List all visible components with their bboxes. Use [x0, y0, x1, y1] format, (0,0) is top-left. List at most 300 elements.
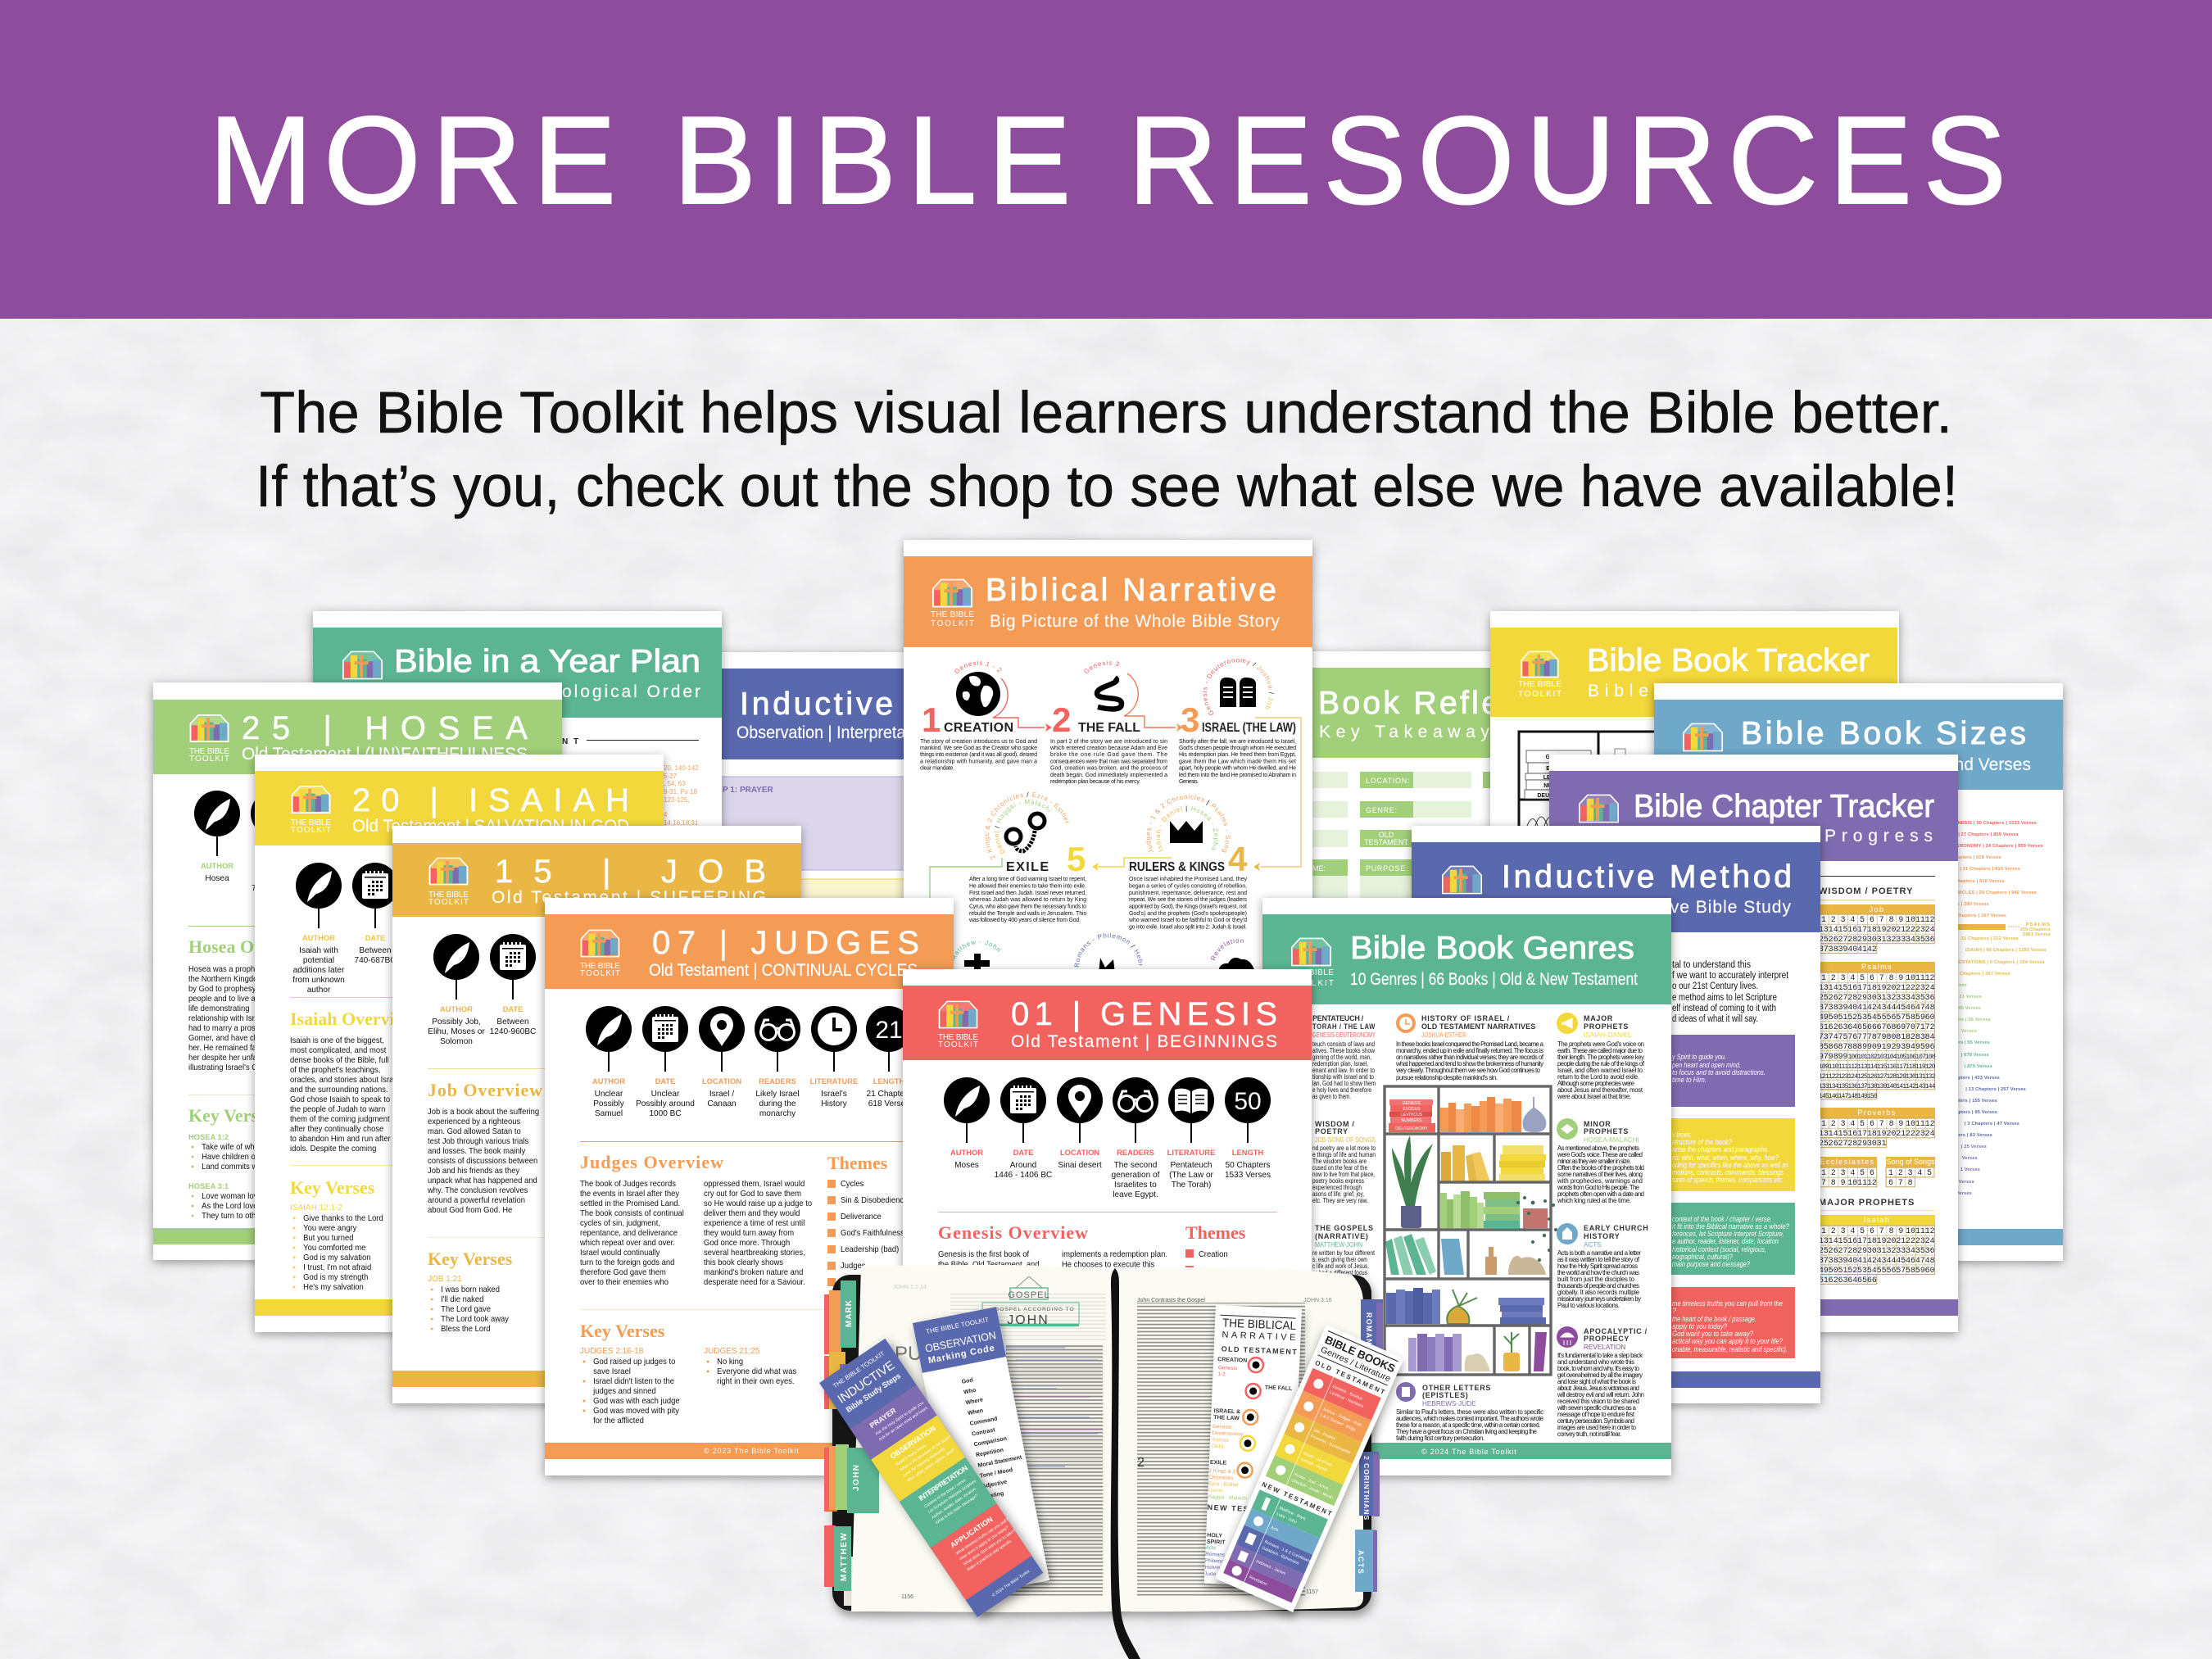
Judges overview: repentance, and deliverance [580, 1229, 678, 1238]
Isaiah header: Old Testament | SALVATION IN GOD [352, 817, 629, 836]
bookmark: bible books genres: Joshua - Judges - Ruth [1321, 1407, 1362, 1428]
step 4: rulers and kings: appointed by God), the Kings (Israel's request, not [1129, 904, 1247, 909]
genre: other letters: OTHER LETTERS [1422, 1384, 1491, 1392]
genre: other letters: They have a great focus on Christian living and keeping the [1396, 1428, 1537, 1435]
Sizes list: | 678 Verses [1961, 1053, 1989, 1058]
Isaiah overview: oracles, and stories about Israel [290, 1076, 400, 1085]
Isaiah icons and facts: author [307, 986, 331, 995]
Hosea key verses: As the Lord loves [202, 1202, 261, 1211]
gospel heading on the page: JOHN [1007, 1313, 1049, 1327]
Job key verses: The Lord took away [441, 1315, 509, 1324]
major prophets heading and Isaiah grid: Isaiah [1864, 1216, 1890, 1224]
genre: apocalyptic: will destroy evil and will return. John [1557, 1391, 1644, 1398]
bookshelf illustration: EXODUS [1403, 1107, 1421, 1112]
bookmark: the biblical narrative: SPIRIT [1207, 1539, 1226, 1546]
Judges overview: settled in the Promised Land. [580, 1199, 680, 1208]
bookmark: inductive bible study steps: Read it many times. [895, 1443, 928, 1467]
bookshelf illustration: DEUTERONOMY [1395, 1126, 1428, 1131]
card: 01 Genesis [903, 969, 1312, 1547]
Sizes footer [1654, 1229, 2063, 1245]
Sizes list: 1 Verses [1960, 1167, 1980, 1172]
Judges facts: during the [759, 1099, 796, 1108]
Judges facts: Israel's [821, 1090, 847, 1099]
bookmark: the biblical narrative: ISRAEL & [1213, 1408, 1240, 1415]
bookmark: observation marking code: Comparison [973, 1436, 1008, 1448]
card: Bible Book Tracker: TOOLKIT [1518, 690, 1562, 699]
genre: early church history: built from just the disciples to [1557, 1276, 1635, 1283]
Hosea key verses: Key Verses [188, 1105, 274, 1126]
Hosea icons and facts: 750-710 BC [252, 884, 296, 893]
genre: other letters: audiences, which makes context important. The authors wrote [1396, 1415, 1543, 1422]
step 2: the fall: which entered creation because Adam and Eve [1049, 746, 1167, 751]
Judges overview: they would turn away from [704, 1229, 794, 1238]
genre: major prophets: MAJOR [1584, 1014, 1613, 1022]
Job header [392, 843, 801, 917]
Isaiah icons and facts: DATE [365, 933, 385, 942]
Method step: prayer [1657, 1035, 1795, 1107]
bookmark: observation marking code: Command [969, 1416, 998, 1427]
card: Book Reflection: Book Reflection [1318, 686, 1580, 721]
Job header: TOOLKIT [428, 898, 469, 907]
Job key verses: I'll die naked [441, 1295, 483, 1304]
genre: major prophets: earth. These are called major due to [1557, 1047, 1643, 1054]
Job overview: Job and his friends as they [428, 1167, 519, 1176]
bookmark: observation marking code: Repetition [976, 1448, 1004, 1458]
narrative header: Big Picture of the Whole Bible Story [990, 612, 1280, 631]
genre: minor prophets: Often the books of the prophets told [1557, 1164, 1644, 1172]
card: Bible in a Year Plan: 4 [664, 811, 668, 818]
Hosea overview: relationship with Israel [188, 1014, 265, 1023]
Psalms chapter grid: 979899 [1819, 1052, 1847, 1061]
Ecclesiastes and Song of Songs grids: 7 8 9 [1821, 1178, 1845, 1187]
Sizes list: PSALMS [2026, 922, 2051, 927]
genre: pentateuch: redemption plan, Israel, [1312, 1060, 1368, 1067]
Judges facts: AUTHOR [592, 1077, 625, 1086]
card: Bible in a Year Plan: , 54, 63 [664, 780, 686, 787]
card: Bible Book Genres [1262, 898, 1671, 1475]
Genesis facts: Moses [954, 1161, 979, 1170]
step 2: the fall: Genesis 3 [1085, 660, 1119, 673]
step 1: creation: mankind. We see God as the Creator who spoke [920, 746, 1037, 751]
Hosea overview [188, 936, 314, 1072]
Judges themes: Leadership (bad) [841, 1245, 899, 1254]
genre: wisdom and poetry: poetry books express [1312, 1177, 1364, 1185]
Isaiah overview: idols. Despite the coming [290, 1145, 376, 1154]
step 5: exile: was followed by 400 years of silence from God. [968, 918, 1081, 923]
genre: history of Israel: pursue relationship despite mankind's sin. [1396, 1074, 1498, 1081]
Genres header [1262, 914, 1671, 1004]
genre: pentateuch: e holy lives and therefore [1312, 1086, 1371, 1094]
card: Bible Book Tracker: GENESIS [1545, 755, 1571, 760]
major prophets heading and Isaiah grid [1819, 1198, 1935, 1285]
Hosea header: THE BIBLE [189, 747, 229, 756]
bookmark: observation marking code: THE BIBLE TOOLKIT [925, 1316, 990, 1335]
card: Bible in a Year Plan [306, 607, 728, 827]
Psalms chapter grid: 100101102103104105106107108 [1848, 1054, 1936, 1061]
Job overview: about God from God. He [428, 1206, 513, 1215]
bookmark: the biblical narrative: Haggai - Malachi [1208, 1494, 1247, 1502]
Job chapter grid: 101112 [1906, 915, 1935, 924]
step 5: exile: whereas Judah was allowed to return by King [968, 897, 1086, 903]
step 2: the fall: death began. God immediately implemented a [1050, 773, 1167, 778]
bookmark: bible books genres: Acts [1270, 1525, 1280, 1533]
Method intro text: tal to understand this [1672, 960, 1751, 970]
genre: history of Israel: monarchy, ended up in exile and finally returned. The focus is [1396, 1047, 1543, 1054]
Method header: Inductive Method [1502, 859, 1792, 895]
gospel heading on the page [982, 1276, 1079, 1327]
Method header [1412, 842, 1820, 932]
Hosea overview: her. He remained faithful [188, 1044, 273, 1053]
step 1: creation: Genesis 1 - 2 [955, 660, 1001, 673]
step 5: exile [929, 791, 1086, 923]
Judges key verses: save Israel [593, 1367, 631, 1376]
Judges themes: Deliverance [841, 1213, 882, 1222]
genre: minor prophets: which king ruled at the time. [1557, 1197, 1631, 1204]
bookmark: inductive bible study steps: Author, reader, date, location. [931, 1486, 978, 1521]
Hosea key verses: HOSEA 3:1 [188, 1181, 229, 1190]
Psalms chapter grid: 121122123124125126127128129130131132 [1819, 1073, 1936, 1081]
genre: wisdom and poetry: e things of life and human [1312, 1151, 1376, 1158]
card: Bible Chapter Tracker [1549, 755, 1958, 1332]
title: MORE BIBLE RESOURCES [209, 91, 2006, 230]
genre: wisdom and poetry: WISDOM / [1315, 1120, 1355, 1128]
Sizes header: Chapters and Verses [1870, 755, 2031, 774]
Genres header: 10 Genres | 66 Books | Old & New Testament [1350, 970, 1638, 989]
Sizes list: Chapters | 95 Verses [1949, 1110, 1997, 1115]
Hosea key verses: They turn to other gods [202, 1212, 282, 1221]
genre: apocalyptic: about: Jesus. Jesus is victorious and [1557, 1385, 1639, 1392]
Genesis icon row [944, 1077, 1271, 1143]
Hosea icons and facts [188, 791, 297, 927]
card: Bible in a Year Plan: Bible in a Year Plan [394, 644, 700, 679]
narrative header: TOOLKIT [931, 619, 974, 628]
genre: early church history: ACTS [1584, 1241, 1602, 1249]
genre: apocalyptic: get overwhelmed by all the imagery [1557, 1371, 1643, 1379]
Genesis overview [938, 1222, 1167, 1270]
Psalms chapter grid: 495051525354555657585960 [1819, 1013, 1935, 1022]
genre: minor prophets: were God's voice. These are called [1557, 1151, 1643, 1158]
Sizes list: | 25 Verses [1961, 1145, 1987, 1149]
left index tabs: MATTHEW [840, 1532, 849, 1581]
Sizes list: Chapters | 433 Verses [1949, 1076, 2000, 1081]
Sizes list [1900, 821, 2051, 1196]
Genesis facts: Pentateuch [1170, 1161, 1213, 1170]
Ecclesiastes and Song of Songs grids: Song of Songs [1886, 1158, 1935, 1166]
step 3: Israel (the law) [1179, 659, 1296, 785]
bookmark: observation marking code: OBSERVATION [924, 1329, 997, 1355]
Psalms chapter grid: 131415161718192021222324 [1819, 983, 1935, 992]
Genesis facts: 1446 - 1406 BC [995, 1171, 1052, 1180]
Isaiah overview: after they continually chose [290, 1125, 384, 1134]
Hosea header: TOOLKIT [189, 755, 229, 764]
card: Bible in a Year Plan: 14,16,18,31 [664, 819, 699, 827]
Hosea overview: Hosea Overview [188, 936, 314, 957]
genre: other letters: faith during first century persecution. [1396, 1435, 1484, 1442]
Sizes list: Verses [1951, 983, 1967, 988]
left index tabs [824, 1281, 879, 1591]
Judges overview: oppressed them, Israel would [704, 1180, 805, 1189]
Genesis facts: 50 Chapters [1226, 1161, 1270, 1170]
Method step: prayer: time to Him. [1672, 1076, 1707, 1084]
bookmark: inductive bible study steps: INDUCTIVE [835, 1358, 897, 1407]
step 1: creation: a relationship with humanity, and gave man a [920, 759, 1037, 765]
Sizes list: Verses [1961, 1029, 1977, 1034]
genre: other letters [1396, 1382, 1543, 1442]
Judges overview: The book consists of continual [580, 1209, 684, 1218]
genre: minor prophets: prophets often open with a date and [1557, 1190, 1644, 1198]
Judges overview: therefore God gave them [580, 1268, 666, 1277]
bookmark: observation marking code [913, 1307, 1049, 1597]
Judges facts: Likely Israel [755, 1090, 800, 1099]
genre: wisdom and poetry: etc. They are very raw. [1312, 1197, 1368, 1204]
Sizes list: | 13 Chapters | 257 Verses [1965, 1087, 2026, 1092]
genre: early church history [1557, 1223, 1648, 1309]
Judges footer: © 2023 The Bible Toolkit [704, 1447, 800, 1455]
Genesis overview: the Bible, Old Testament, and [938, 1260, 1040, 1270]
Job chapter grid: 1 2 3 4 5 6 7 8 9 [1821, 915, 1903, 924]
Judges overview: cycles of sin, judgment, [580, 1219, 660, 1228]
bookmark: inductive bible study steps: What is the main message? [935, 1494, 979, 1525]
Judges key verses: No king [717, 1358, 743, 1367]
Judges header [545, 914, 954, 989]
step 4: rulers and kings: punishment, repentance, deliverance, rest and [1129, 891, 1247, 896]
Sizes list: LEVITICUS | 27 Chapters | 859 Verses [1931, 832, 2019, 837]
bookmark: inductive bible study steps: Context of the book / verse. [923, 1477, 968, 1509]
Job overview: Job Overview [428, 1080, 542, 1100]
genre: early church history: globally. It also records multiple [1557, 1289, 1639, 1296]
genre: history of Israel: what happened and tend to show the brokenness of humanity [1395, 1060, 1543, 1067]
Method step: application: the heart of the book / passage. [1672, 1315, 1756, 1323]
Isaiah overview: Isaiah Overview [290, 1009, 415, 1029]
Sizes list: 10 Chapters | 167 Verses [1949, 913, 2006, 918]
Genesis themes: Themes [1185, 1222, 1246, 1243]
bookshelf illustration: NUMBERS [1401, 1118, 1422, 1123]
genre: apocalyptic [1557, 1326, 1648, 1438]
card: Book Reflection: OLD [1379, 831, 1394, 839]
Judges overview: mankind's broken nature and [704, 1268, 803, 1277]
Isaiah key verses: He's my salvation [303, 1283, 364, 1292]
Method intro text [1672, 960, 1789, 1024]
Ecclesiastes and Song of Songs grids: 6 7 8 [1888, 1178, 1913, 1187]
bookmark: bible books genres: Genesis - Exodus [1331, 1385, 1363, 1402]
bookmark: the biblical narrative: Hebrews - [1204, 1565, 1229, 1571]
bookmark: the biblical narrative: Chronicles [1208, 1475, 1234, 1481]
bookmark: inductive bible study steps: Who, what, when, where, why? [906, 1448, 956, 1484]
Chapter Tracker header: Progress [1824, 827, 1933, 845]
bookmark: bible books genres: 1 & 2 Samuel - Kings [1319, 1412, 1357, 1433]
Isaiah icons and facts: Isaiah with [299, 946, 338, 955]
bookmark: bible books genres: Romans - 1 & 2 Corinthians [1263, 1539, 1312, 1565]
genre: other letters: these for a reason, at a specific time, within a certain context. [1396, 1421, 1540, 1429]
Isaiah icons and facts: potential [303, 956, 334, 965]
genre: pentateuch: atives. These books show [1312, 1047, 1375, 1054]
Judges themes [827, 1153, 909, 1286]
genre: minor prophets: MINOR [1584, 1120, 1611, 1128]
Judges overview: turn to the foreign gods and [580, 1258, 674, 1267]
Isaiah icons and facts: Between [359, 946, 392, 955]
right page: 2 [1137, 1456, 1145, 1470]
bookmark: inductive bible study steps: What does God want you to take? [963, 1529, 1017, 1567]
Judges key verses: Key Verses [580, 1321, 665, 1341]
genre: pentateuch: lan, God had to show them [1312, 1080, 1376, 1087]
step 1: creation: things into existence (and it was all good), desired [920, 752, 1037, 758]
bookmark: inductive bible study steps: Look for marking keywords. [903, 1446, 947, 1478]
genre: history of Israel: OLD TESTAMENT NARRATIVES [1421, 1022, 1536, 1031]
Judges key verses: judges and sinned [592, 1387, 656, 1396]
genre: early church history: EARLY CHURCH [1584, 1224, 1648, 1232]
bookmark: the biblical narrative: Jude [1204, 1571, 1217, 1577]
bookmark: observation marking code: Feeling [984, 1491, 1004, 1500]
Isaiah key verses: God is my strength [303, 1273, 368, 1282]
Sizes list: 21 Verses [1959, 995, 1982, 999]
step 2: the fall [1049, 660, 1182, 785]
right page: 1157 [1306, 1589, 1318, 1595]
step 1: creation: The story of creation introduces us to God and [920, 739, 1037, 745]
Judges key verses: Israel didn't listen to the [593, 1377, 674, 1386]
Judges icon row [586, 1006, 912, 1072]
card: Bible in a Year Plan: ological Order [562, 682, 700, 701]
Genesis themes: Sin [1199, 1267, 1210, 1276]
Job chapter grid: Job [1870, 905, 1884, 913]
Method step: application: ? [1672, 1307, 1677, 1315]
Method intro text: d ideas of what it will say. [1672, 1014, 1758, 1024]
bookmark: bible books genres: Matthew - Mark [1278, 1506, 1307, 1521]
Method step: interpretation: e author, reader, listener, date, location [1672, 1237, 1779, 1245]
bookmark: inductive bible study steps: Make it practical and specific. [966, 1539, 1013, 1572]
card: Bible Book Tracker: DEUTERONOMY [1537, 793, 1583, 799]
genre: apocalyptic: with seven specific churches as a [1557, 1404, 1637, 1412]
Isaiah overview: God chose Isaiah to speak to [290, 1095, 391, 1104]
Sizes list: 21 Chapters | 618 Verses [1944, 855, 2001, 860]
Genesis facts: AUTHOR [950, 1148, 983, 1157]
Genesis facts [938, 1148, 1277, 1213]
Judges key verses: JUDGES 2:16-18 [580, 1347, 644, 1356]
card: Bible Book Sizes [1654, 683, 2063, 1261]
bookmark: bible books genres: Galatians - Ephesians [1261, 1546, 1300, 1566]
Isaiah key verses: I trust, I'm not afraid [303, 1263, 371, 1272]
Judges themes: Cycles [841, 1180, 863, 1189]
Job chapter grid: 131415161718192021222324 [1819, 925, 1935, 934]
Isaiah key verses: God is my salvation [303, 1253, 370, 1262]
genre: the gospels: MATTHEW-JOHN [1315, 1241, 1362, 1249]
Judges facts: Canaan [707, 1099, 737, 1108]
bookmark: the biblical narrative: Genesis - [1213, 1424, 1235, 1430]
Genres header: Bible Book Genres [1350, 931, 1634, 966]
step 4: rulers and kings: 4 [1228, 840, 1248, 878]
Genesis facts: DATE [1013, 1148, 1033, 1157]
bookmark: bible books genres: Leviticus - Numbers [1329, 1390, 1364, 1409]
Method step: interpretation: main purpose and message? [1672, 1260, 1751, 1268]
Job icons and facts: Possibly Job, [432, 1018, 481, 1027]
genre: pentateuch: teuch consists of laws and [1312, 1040, 1375, 1048]
Psalms chapter grid: 109110111112113114115116117118119120 [1819, 1063, 1936, 1071]
genre: apocalyptic: book, to whom and why. It's easy to [1557, 1365, 1640, 1372]
right index tabs: ACTS [1357, 1550, 1365, 1575]
Method step: observation: motions, contrasts, commands, blessings [1672, 1168, 1784, 1176]
Job key verses: JOB 1:21 [428, 1275, 462, 1284]
card: Inductive (back left): Observation | Interpretation [737, 723, 931, 742]
bookmark: the biblical narrative: Acts [1205, 1545, 1216, 1551]
Judges facts: History [821, 1099, 848, 1108]
step 4: rulers and kings: began a series of cycles consisting of rebellion, [1129, 883, 1247, 890]
Judges header: THE BIBLE [580, 962, 620, 971]
genre: apocalyptic: PROPHECY [1584, 1335, 1630, 1343]
Genesis facts: LOCATION [1060, 1148, 1099, 1157]
Genesis facts: generation of [1112, 1171, 1160, 1180]
card: Bible Book Tracker: THE BIBLE [1518, 680, 1562, 689]
genre: apocalyptic: and understand who wrote this [1557, 1358, 1634, 1366]
Method intro text: f we want to accurately interpret [1672, 971, 1789, 981]
genre: the gospels: s, each giving their own [1312, 1256, 1367, 1263]
Psalms chapter grid: 858687888990919293949596 [1819, 1042, 1935, 1051]
genre: wisdom and poetry: JOB-SONG OF SONGS [1315, 1136, 1376, 1144]
Method step: observation [1657, 1118, 1795, 1191]
Method step: application: me timeless truths you can pull from the [1672, 1299, 1783, 1308]
Method step: application [1657, 1287, 1795, 1358]
bookmark: observation marking code: Where [965, 1397, 984, 1406]
bookmark: observation marking code: Who [963, 1388, 977, 1396]
genre: major prophets [1557, 1013, 1645, 1100]
card: Bible in a Year Plan: N T [562, 737, 580, 746]
Judges themes: Judges [841, 1262, 865, 1271]
genre: early church history: thousands of people and churches [1557, 1282, 1639, 1290]
genre: wisdom and poetry: experienced through [1312, 1184, 1362, 1191]
Judges facts [580, 1077, 919, 1142]
bookmark: the biblical narrative: CREATION [1217, 1357, 1247, 1364]
step 1: creation: 1 [922, 700, 941, 739]
card: Bible Book Tracker: NUMBERS [1543, 783, 1573, 789]
Judges facts: 618 Verses [868, 1099, 909, 1108]
Genesis themes: Creation [1199, 1250, 1228, 1259]
Isaiah overview: and the surrounding nations. [290, 1086, 388, 1095]
genre: early church history: as it was written to tell the story of [1557, 1256, 1640, 1263]
Judges facts: Unclear [595, 1090, 623, 1099]
Hosea key verses: HOSEA 1:2 [188, 1132, 229, 1141]
Psalms chapter grid: 133134135136137138139140141142143144 [1819, 1083, 1936, 1090]
Sizes list: 10 Chapters | 280 Verses [1932, 902, 1989, 907]
Sizes list: 22 Chapters | 816 Verses [1947, 879, 2005, 884]
step 1: creation: CREATION [944, 721, 1013, 735]
genre: early church history: how the Holy Spirit spread across [1557, 1262, 1638, 1270]
Hosea header: 25 | HOSEA [242, 710, 528, 746]
bookmark: inductive bible study steps: PRAYER [868, 1406, 898, 1430]
step 4: rulers and kings [1092, 795, 1260, 931]
Method step: observation: tures of speech, themes, comparisons etc. [1672, 1176, 1784, 1184]
Judges overview: desperate need for a Saviour. [704, 1278, 805, 1287]
bookmark: inductive bible study steps: Let Scripture interpret Scripture. [927, 1478, 978, 1515]
step 4: rulers and kings: God's) and the prophets (God's spokespeople) [1129, 911, 1247, 917]
Proverbs chapter grid: Proverbs [1857, 1108, 1897, 1117]
Isaiah overview: most complicated, and most [290, 1046, 387, 1055]
bookmark: inductive bible study steps: What timeless truths can you pull? [955, 1517, 1010, 1557]
Judges facts: LENGTH [873, 1077, 904, 1086]
Judges themes: Sin & Disobedience [841, 1196, 909, 1205]
bookmark: observation marking code: God [961, 1377, 973, 1385]
Isaiah icons and facts: AUTHOR [302, 933, 335, 942]
Judges overview: this book clearly shows [704, 1258, 783, 1267]
card: Bible Book Tracker [1484, 607, 1906, 826]
Method step: prayer: to focus and to avoid distractions. [1672, 1068, 1766, 1077]
bookmark: the biblical narrative: (Job) [1212, 1444, 1223, 1450]
bookmark: bible books genres: Revelation [1249, 1575, 1268, 1587]
bookmark: the biblical narrative: NARRATIVE [1222, 1330, 1296, 1343]
bookmark: inductive bible study steps: THE BIBLE TOOLKIT [832, 1349, 886, 1389]
step 5: exile: After a long time of God warning Israel to repent, [969, 877, 1086, 882]
Isaiah overview: Isaiah is one of the biggest, [290, 1036, 384, 1045]
Judges key verses: for the afflicted [593, 1416, 644, 1426]
major prophets heading and Isaiah grid: 252627282930313233343536 [1819, 1246, 1935, 1255]
Isaiah footer [255, 1299, 664, 1316]
